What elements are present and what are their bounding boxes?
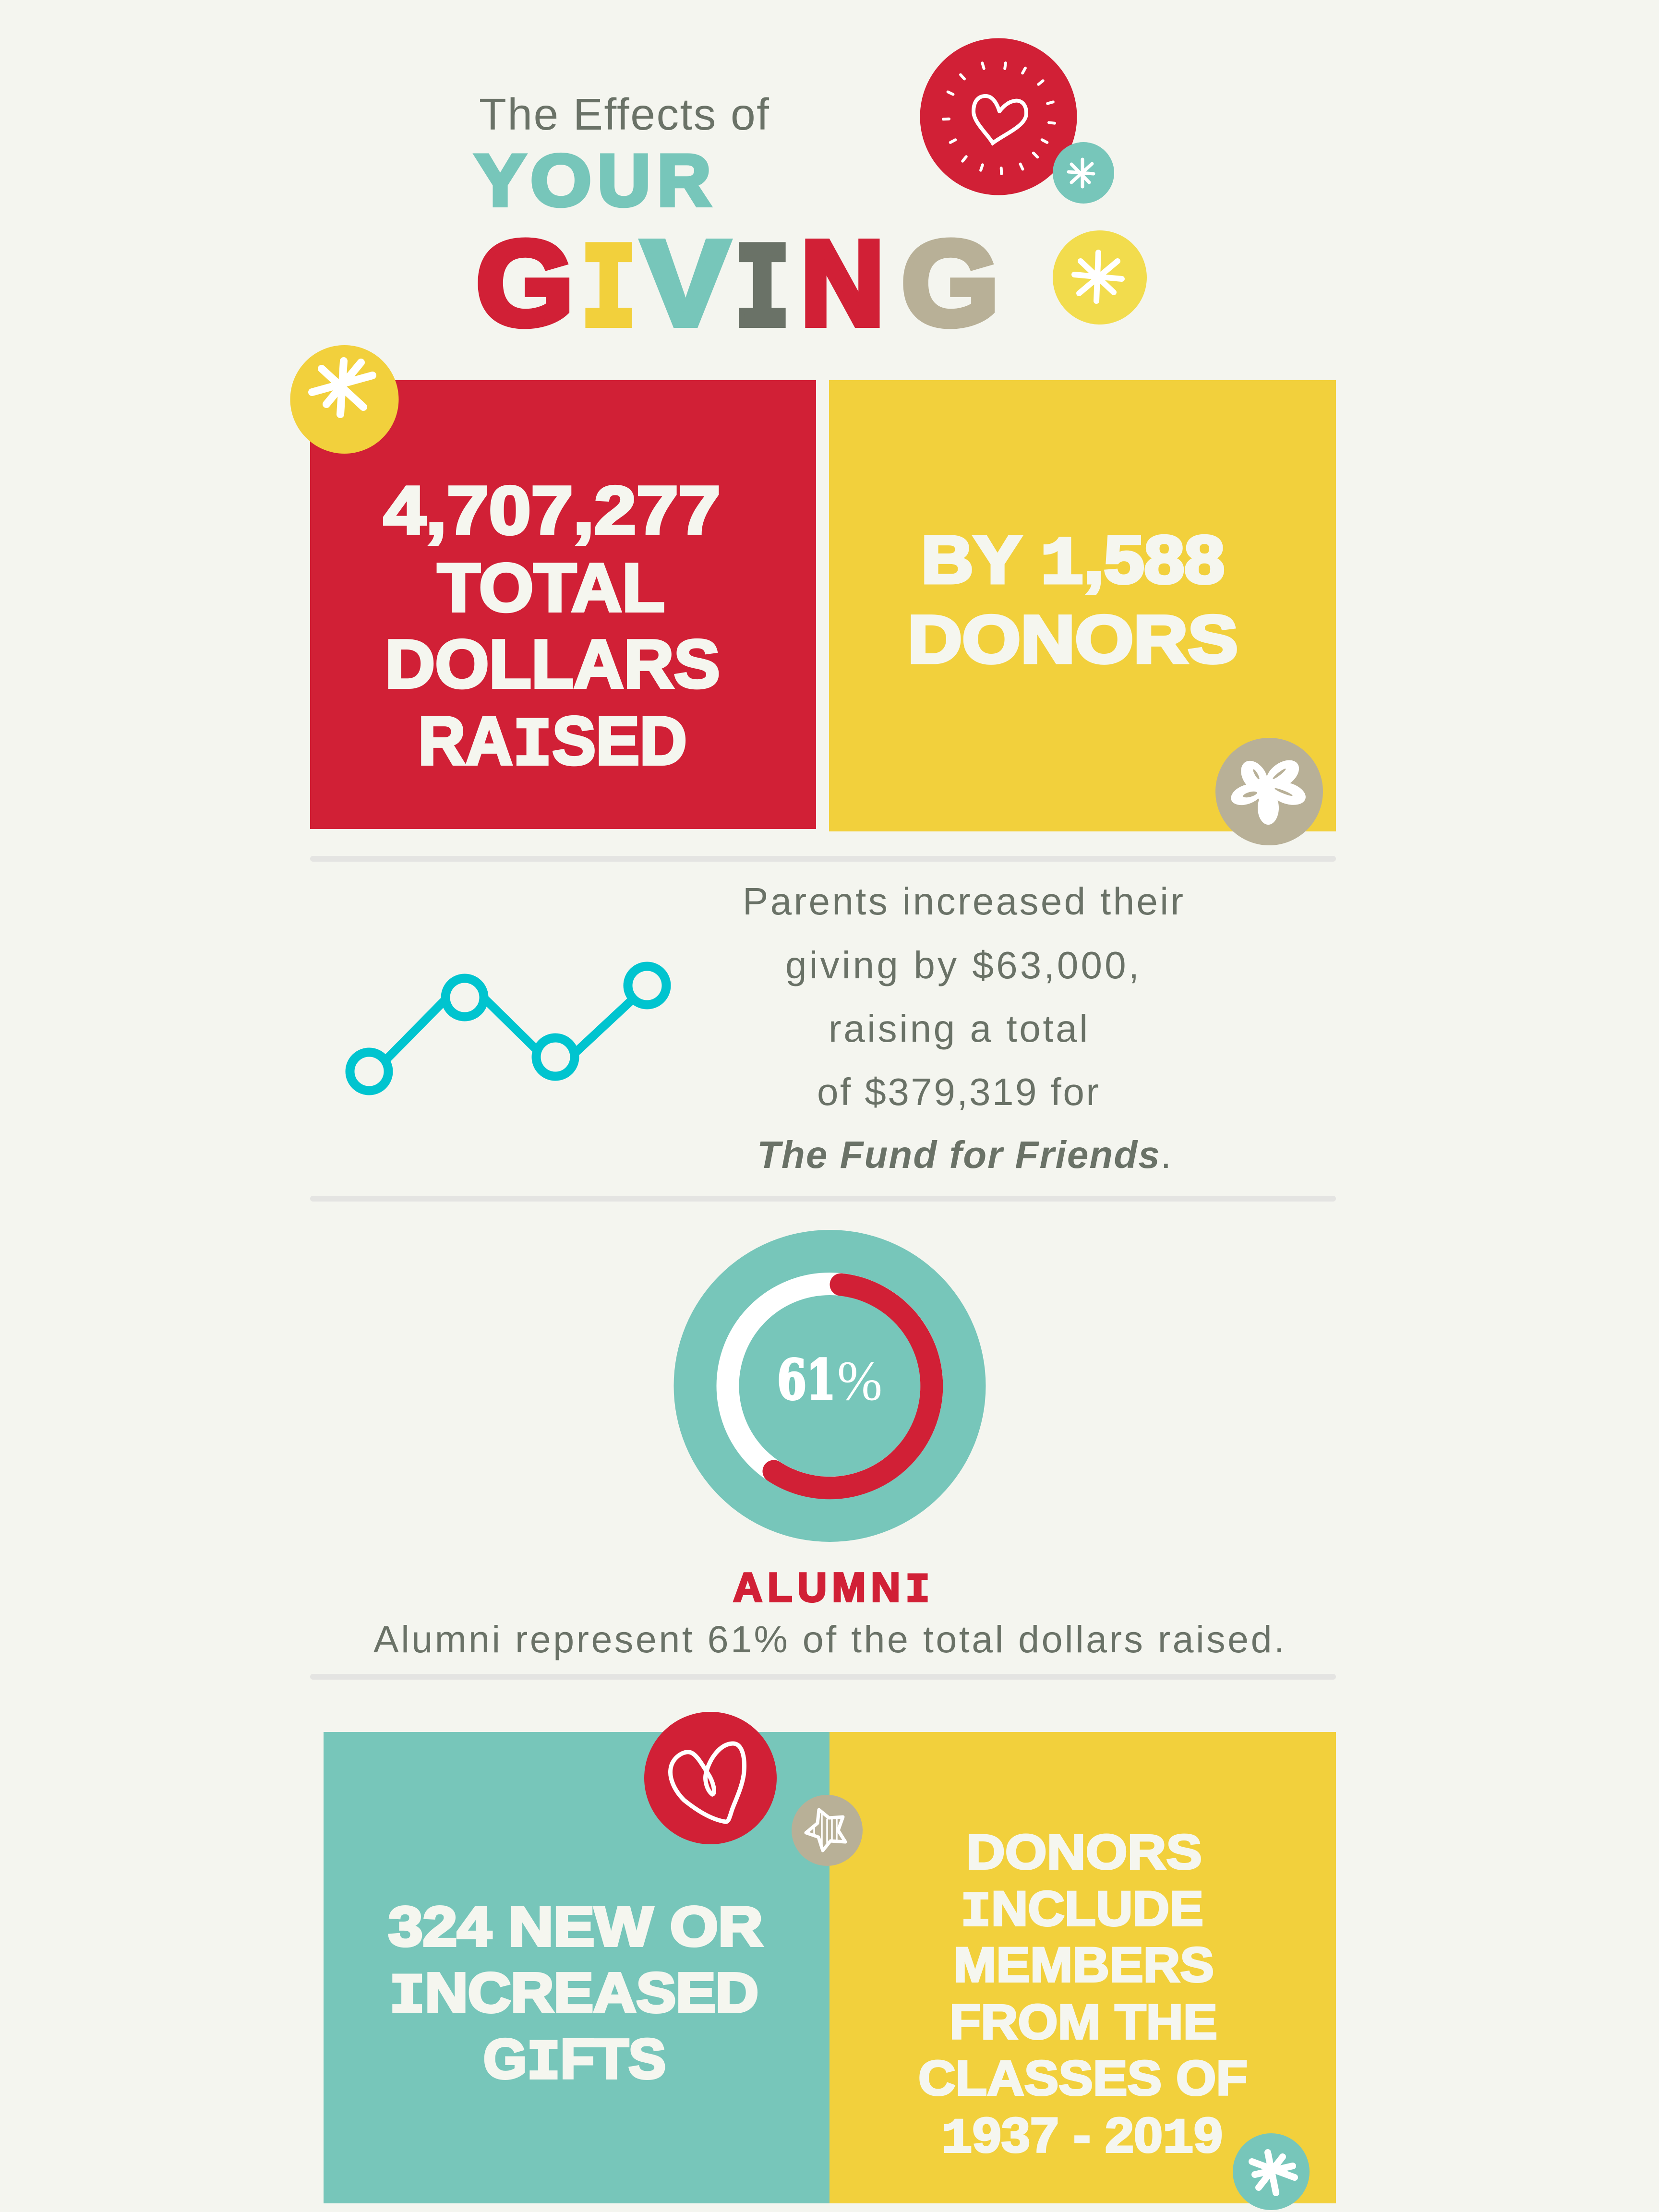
icon: tan flower badge: [1215, 738, 1323, 845]
stat: 324 new or increased gifts: 324 NEW OR: [388, 1895, 763, 1958]
heading: alumni: ALUMNI: [733, 1565, 930, 1614]
panel: total dollars raised: [310, 380, 816, 829]
stat: by 1,588 donors: [908, 522, 1238, 677]
text block: parents giving: of $379,319 for: [817, 1070, 1099, 1113]
title line: GIVING: [476, 216, 999, 361]
text block: parents giving: The Fund for Friends.: [757, 1133, 1171, 1176]
text block: donors include members from the classes of 1937 - 2019: [918, 1825, 1248, 2167]
title line: YOUR: U: [598, 140, 650, 221]
icon: yellow asterisk badge on red panel: [290, 345, 398, 454]
stat: 4,707,277 total dollars raised: DOLLARS: [385, 626, 720, 702]
stat: 324 new or increased gifts: [388, 1895, 763, 2095]
text block: parents giving: raising a total: [829, 1007, 1088, 1050]
text block: parents giving: [743, 880, 1183, 1176]
title line: YOUR: O: [530, 140, 591, 221]
text block: donors include members from the classes of 1937 - 2019: CLASSES OF: [918, 2051, 1248, 2105]
title line: GIVING: I: [581, 225, 637, 361]
text block: donors include members from the classes of 1937 - 2019: 1937 - 2019: [941, 2108, 1223, 2167]
panel: new or increased gifts: [324, 1732, 830, 2203]
stat: 324 new or increased gifts: GIFTS: [483, 2028, 666, 2095]
chart: 61% alumni donut: [674, 1230, 986, 1542]
title line: GIVING: G: [902, 216, 999, 350]
title: [475, 89, 999, 361]
stat: 4,707,277 total dollars raised: TOTAL: [437, 550, 665, 626]
icon: teal asterisk badge: [1233, 2133, 1310, 2210]
title line: YOUR: R: [657, 140, 711, 221]
value label: 61%: 61: [777, 1348, 836, 1412]
stat: 324 new or increased gifts: INCREASED: [389, 1961, 758, 2029]
text block: parents giving: giving by $63,000,: [785, 944, 1139, 986]
stat: 4,707,277 total dollars raised: RAISED: [418, 703, 687, 785]
title line: GIVING: G: [476, 216, 574, 350]
title line: GIVING: N: [801, 216, 884, 350]
title line: GIVING: V: [642, 216, 729, 350]
text block: donors include members from the classes of 1937 - 2019: FROM THE: [950, 1995, 1217, 2049]
icon: small teal asterisk badge: [1053, 142, 1114, 204]
icon: yellow asterisk badge: [1053, 230, 1147, 325]
text block: donors include members from the classes of 1937 - 2019: DONORS: [966, 1825, 1202, 1879]
percent sign: %: [837, 1349, 882, 1412]
stat: 4,707,277 total dollars raised: 4,707,277: [384, 472, 721, 549]
panel: donor classes: [830, 1732, 1336, 2203]
text block: donors include members from the classes of 1937 - 2019: MEMBERS: [954, 1937, 1214, 1992]
icon: tan star badge: [792, 1795, 863, 1866]
text block: parents giving: Parents increased their: [743, 880, 1183, 923]
stat: by 1,588 donors: DONORS: [908, 601, 1238, 677]
text block: alumni share: Alumni represent 61% of the total dollars raised.: [373, 1618, 1285, 1660]
title line: YOUR: [475, 140, 711, 221]
panel: donors count: [829, 380, 1336, 831]
icon: red heart badge on teal panel: [644, 1712, 777, 1844]
chart: rising line icon: [350, 966, 666, 1091]
icon: red heart badge: [920, 38, 1077, 195]
title line: The Effects of: The Effects of: [479, 89, 769, 139]
stat: 4,707,277 total dollars raised: [384, 472, 721, 785]
text block: donors include members from the classes of 1937 - 2019: INCLUDE: [961, 1881, 1203, 1940]
title line: GIVING: I: [734, 225, 790, 361]
stat: by 1,588 donors: BY 1,588: [921, 522, 1225, 603]
title line: YOUR: Y: [475, 140, 526, 221]
